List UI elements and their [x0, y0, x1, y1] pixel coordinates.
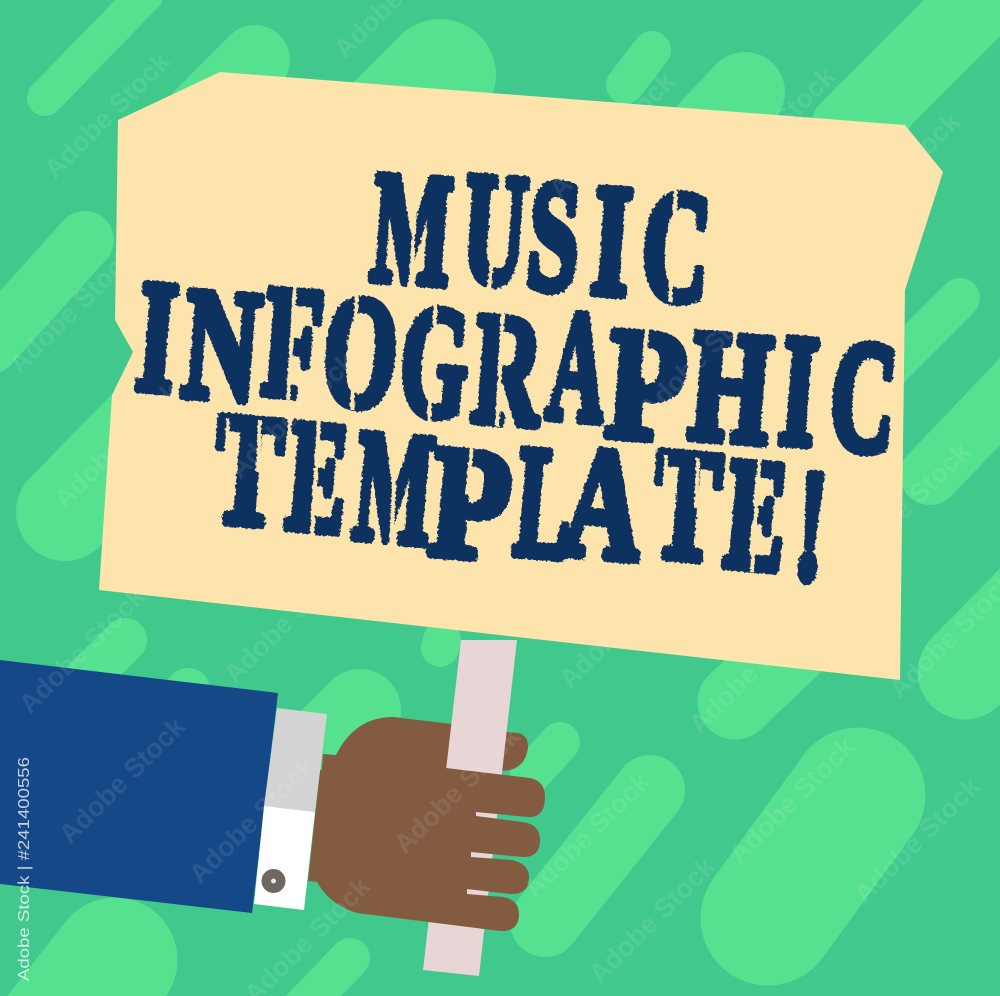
- watermarks: Adobe Stock: [838, 436, 977, 574]
- watermarks: Adobe Stock: [3, 241, 142, 379]
- title line: INFOGRAPHIC: H: [684, 296, 778, 478]
- title line: MUSIC: U: [458, 139, 532, 319]
- watermarks: Adobe Stock: [388, 721, 527, 859]
- title: [131, 139, 903, 614]
- title line: TEMPLATE!: E: [281, 387, 355, 567]
- hand: fingers and palm: [308, 768, 545, 931]
- watermarks: Adobe Stock: [553, 556, 692, 694]
- title line: TEMPLATE!: T: [646, 414, 727, 595]
- title line: INFOGRAPHIC: I: [774, 302, 824, 479]
- watermarks: Adobe Stock: [53, 711, 192, 849]
- watermarks: Adobe Stock: [703, 61, 842, 199]
- watermarks: Adobe Stock: [223, 346, 362, 484]
- watermarks: Adobe Stock: [848, 771, 987, 909]
- title line: INFOGRAPHIC: R: [467, 280, 549, 461]
- title line: TEMPLATE!: !: [789, 437, 834, 614]
- title line: INFOGRAPHIC: A: [542, 278, 613, 457]
- stock id label: Adobe Stock | #241400556: [16, 757, 33, 981]
- watermarks: Adobe Stock: [168, 86, 307, 224]
- watermarks: Adobe Stock: [583, 851, 722, 989]
- watermarks: Adobe Stock: [183, 751, 322, 889]
- title line: INFOGRAPHIC: I: [131, 249, 183, 426]
- title line: TEMPLATE!: T: [207, 380, 289, 560]
- watermarks: Adobe Stock: [683, 601, 822, 739]
- cuff button: [262, 869, 286, 893]
- title line: INFOGRAPHIC: G: [394, 271, 475, 452]
- sign board: [99, 72, 943, 680]
- title line: INFOGRAPHIC: P: [601, 295, 692, 475]
- title line: TEMPLATE!: E: [719, 424, 794, 605]
- watermarks: Adobe Stock: [633, 286, 772, 424]
- jacket sleeve: [0, 660, 278, 913]
- title line: TEMPLATE!: L: [509, 414, 580, 593]
- shirt cuff: [254, 708, 327, 910]
- watermarks: Adobe Stock: [543, 66, 682, 204]
- watermarks: Adobe Stock: [38, 46, 177, 184]
- watermarks: Adobe Stock: [218, 551, 357, 689]
- watermarks: Adobe Stock: [828, 106, 967, 244]
- title line: INFOGRAPHIC: N: [177, 255, 266, 435]
- watermarks: Adobe Stock: [13, 581, 152, 719]
- title line: TEMPLATE!: P: [424, 414, 517, 595]
- title line: TEMPLATE!: A: [557, 414, 649, 595]
- hand: back of palm and thumb: [320, 717, 528, 790]
- stick handle: [423, 640, 517, 976]
- title line: MUSIC: I: [587, 153, 637, 329]
- title line: MUSIC: C: [637, 157, 716, 337]
- title line: MUSIC: [367, 139, 716, 337]
- stencil gaps in the letters: [226, 166, 760, 572]
- title line: TEMPLATE!: [207, 380, 834, 614]
- title line: INFOGRAPHIC: C: [824, 306, 903, 486]
- watermarks: Adobe Stock: [723, 731, 862, 869]
- title line: TEMPLATE!: M: [348, 398, 440, 579]
- title line: INFOGRAPHIC: F: [257, 254, 329, 433]
- title line: MUSIC: M: [367, 139, 458, 319]
- title line: INFOGRAPHIC: [131, 249, 903, 486]
- title line: INFOGRAPHIC: O: [317, 263, 404, 443]
- watermarks: Adobe Stock: [48, 376, 187, 514]
- title line: MUSIC: S: [523, 147, 586, 325]
- watermarks: Adobe Stock: [518, 766, 657, 904]
